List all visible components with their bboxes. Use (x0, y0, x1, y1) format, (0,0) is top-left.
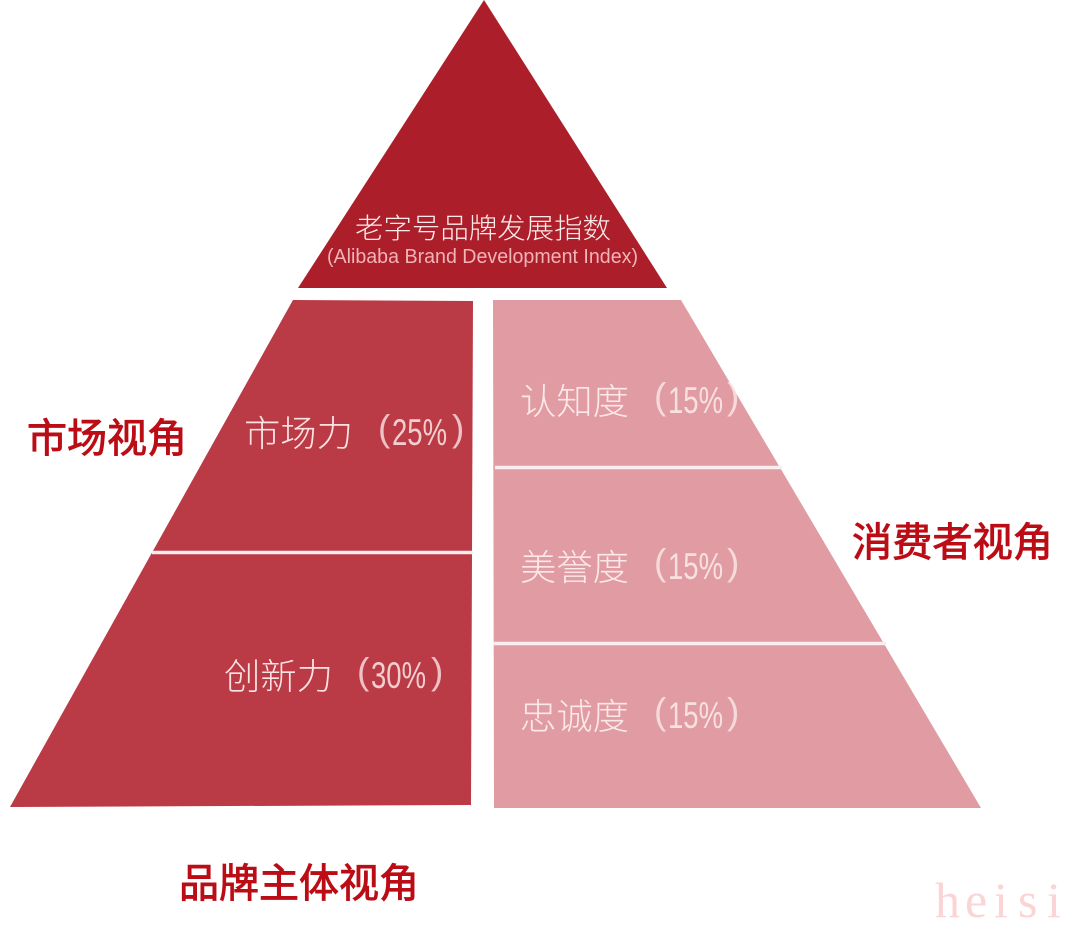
watermark: heisi (935, 872, 1061, 928)
label: innovation power: ( (357, 651, 370, 692)
label: loyalty: ( (654, 691, 667, 732)
panel: market perspective, left half of pyramid (10, 300, 473, 807)
panel: top tier, brand development index (298, 0, 667, 288)
panel: consumer perspective, right half of pyramid (493, 300, 981, 808)
label: reputation (520, 539, 739, 591)
label: market power: 25% (392, 412, 447, 453)
label: reputation: 15% (668, 546, 723, 587)
label: innovation power (224, 648, 443, 700)
label: innovation power: ) (431, 651, 443, 692)
label: loyalty (520, 688, 739, 740)
top tier subtitle: (Alibaba Brand Development Index) (327, 246, 638, 268)
heading: consumer perspective: 消费者视角 (852, 510, 1053, 568)
label: loyalty: 忠诚度 (520, 688, 629, 740)
label: awareness: ) (727, 376, 739, 417)
label: market power: ) (452, 408, 464, 449)
label: awareness: ( (654, 376, 667, 417)
label: market power: ( (378, 408, 391, 449)
label: awareness (520, 373, 739, 425)
label: market power: 市场力 (244, 405, 353, 457)
label: reputation: 美誉度 (520, 539, 629, 591)
label: innovation power: 30% (371, 655, 426, 696)
label: market power (244, 405, 464, 457)
label: reputation: ) (727, 542, 739, 583)
label: loyalty: ) (727, 691, 739, 732)
heading: market perspective: 市场视角 (27, 406, 187, 464)
label: awareness: 15% (668, 380, 723, 421)
top tier title: 老字号品牌发展指数 (355, 207, 611, 247)
label: loyalty: 15% (668, 695, 723, 736)
label: reputation: ( (654, 542, 667, 583)
heading: brand perspective: 品牌主体视角 (179, 851, 419, 909)
label: awareness: 认知度 (520, 373, 629, 425)
label: innovation power: 创新力 (224, 648, 333, 700)
